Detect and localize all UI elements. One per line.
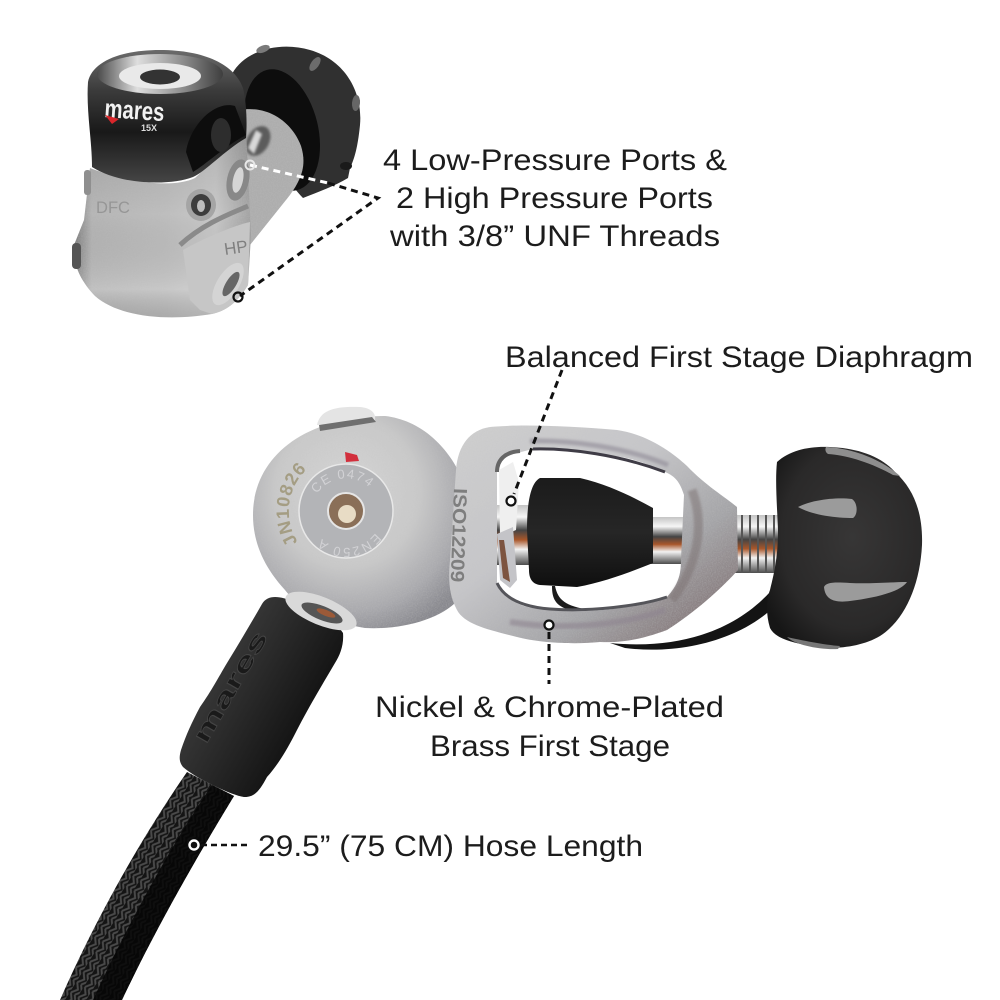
text: plating label: Nickel & Chrome-Plated [375,691,724,724]
embossed labels: DFC [96,198,130,217]
rubber cone [527,478,653,587]
chrome highlight [248,130,262,154]
collar logo: mares [188,626,274,748]
icon: main regulator product photo [253,407,922,650]
hex nut [499,462,519,537]
bottom port [281,584,361,638]
upper yoke [232,109,303,245]
red mark [345,452,359,462]
callout: diaphragm leader line [514,370,562,494]
dark cap [88,50,247,183]
ISO mark: ISO12209 [446,488,470,583]
icon: upper regulator product photo: 15X [141,123,157,133]
rear knob [767,447,922,649]
disc engraving bottom: EN250 A [320,534,382,557]
text: ports label: 4 Low-Pressure Ports & [383,144,727,177]
icon: upper regulator product photo: HP [223,237,249,259]
HP section [183,222,250,314]
marker: diaphragm ring [506,496,516,506]
thread [735,515,780,573]
marker: hose ring [190,840,198,850]
icon: braided hose [60,597,343,1000]
text: ports label [383,144,727,253]
first stage ball [253,416,458,628]
upper knob [232,43,361,199]
text: ports label: with 3/8” UNF Threads [389,220,720,253]
inner stem [495,505,535,565]
logo text: mares [104,93,166,127]
body shading [74,130,251,317]
LP port window [186,105,246,172]
hose shadow [93,785,234,1000]
rear hose [610,592,775,650]
chrome socket [240,122,276,160]
marker: port ring white [246,160,254,170]
serial number: JN10826 [276,463,305,544]
text: plating label [375,691,724,763]
silver body [74,130,251,317]
marker: plating ring [544,620,554,630]
callout: plating leader line [548,632,550,684]
swivel chrome bands [497,441,698,626]
icon: upper regulator product photo [72,43,361,317]
text: diaphragm label: Balanced First Stage Diaphragm [505,341,973,374]
rubber collar [180,597,343,797]
text: hose label: 29.5” (75 CM) Hose Length [258,830,643,863]
top port [317,407,376,431]
stem [650,517,684,564]
text: plating label: Brass First Stage [430,730,670,763]
callout: hose leader line [201,844,250,846]
marker: port ring black [234,292,242,302]
callout: ports leader lines [240,165,378,296]
disc engraving top: CE 0474 [312,470,374,492]
center disc [299,464,393,558]
text: ports label: 2 High Pressure Ports [396,182,713,215]
braided hose body [60,772,234,1000]
cap ring [97,54,223,94]
ports [186,189,216,221]
swivel yoke [449,426,738,643]
